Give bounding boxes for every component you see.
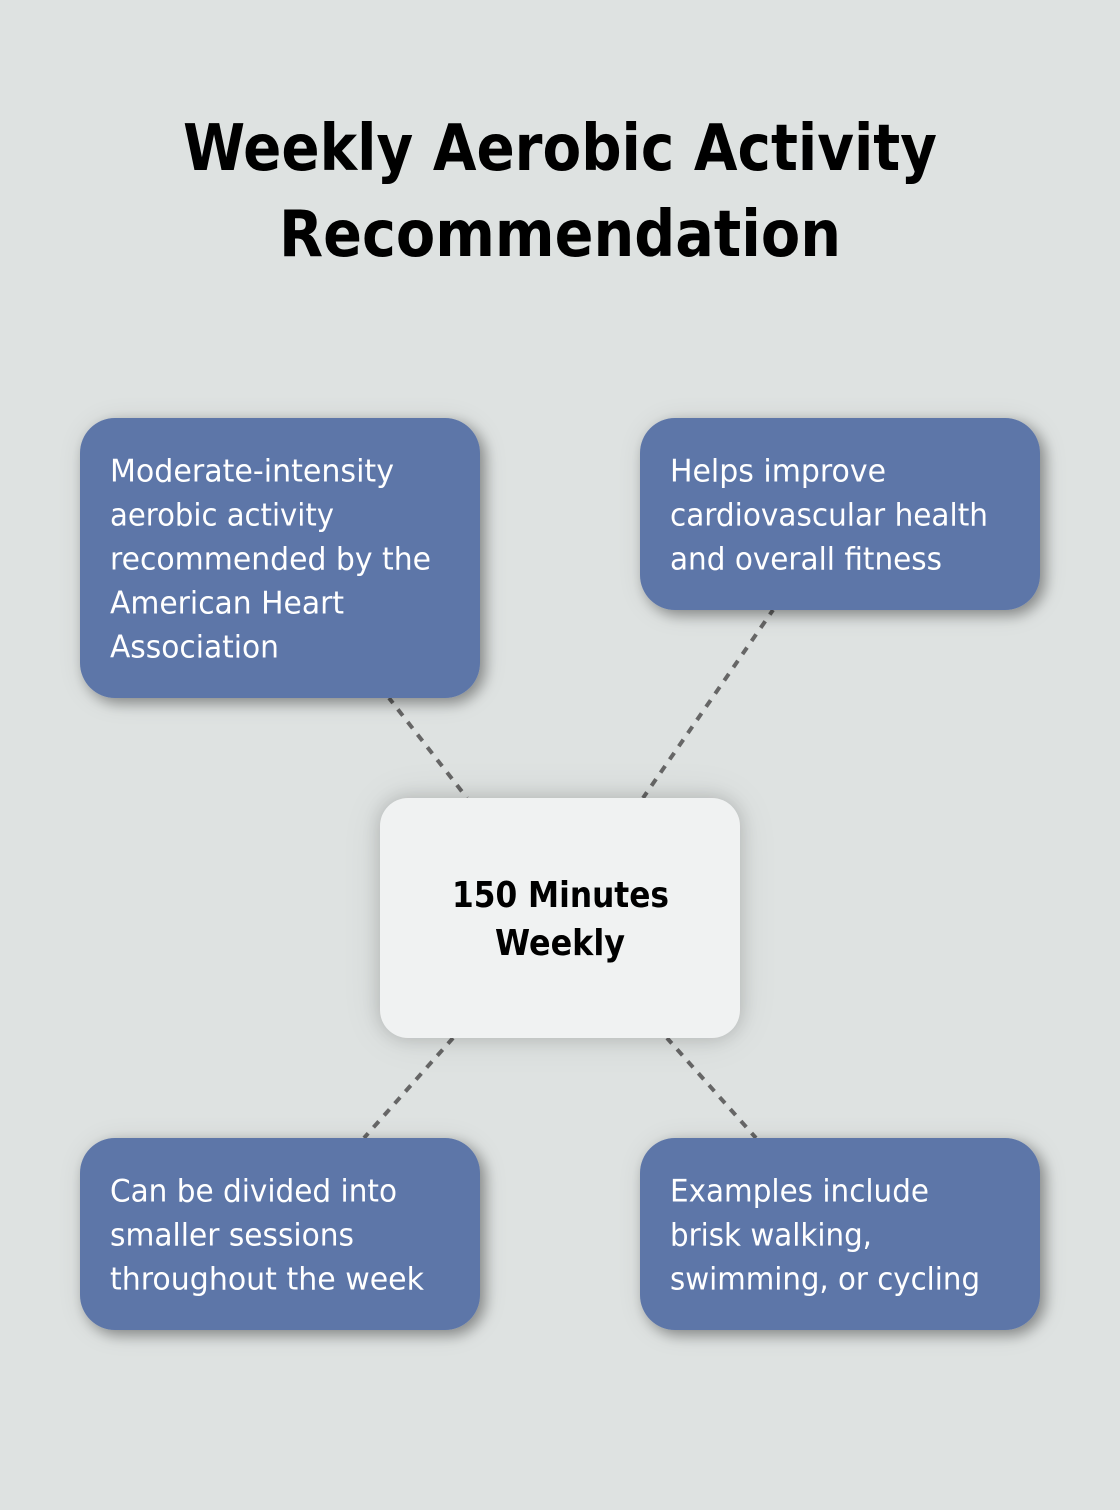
connector: center to bottom-left box xyxy=(364,1038,453,1138)
panel: top-left note: Moderate-intensity xyxy=(110,454,394,490)
panel: bottom-right note xyxy=(640,1138,1040,1330)
title xyxy=(183,112,937,272)
title: Recommendation xyxy=(279,198,841,272)
panel: bottom-right note: brisk walking, xyxy=(670,1218,872,1254)
panel: top-right note: and overall fitness xyxy=(670,542,942,578)
panel: bottom-left note: throughout the week xyxy=(110,1262,425,1298)
panel: top-left note: Association xyxy=(110,630,279,666)
panel: top-left note: American Heart xyxy=(110,586,344,622)
panel: bottom-right note: Examples include xyxy=(670,1174,929,1210)
panel: top-right note: cardiovascular health xyxy=(670,498,988,534)
panel: bottom-left note: smaller sessions xyxy=(110,1218,354,1254)
connector: center to top-right box xyxy=(643,610,773,798)
connector: center to top-left box xyxy=(389,698,467,798)
panel: top-right note: Helps improve xyxy=(670,454,886,490)
panel: top-left note: recommended by the xyxy=(110,542,431,578)
panel: top-left note: aerobic activity xyxy=(110,498,334,534)
connector: center to bottom-right box xyxy=(667,1038,756,1138)
panel: center highlight: Weekly xyxy=(495,923,625,964)
panel: top-right note xyxy=(640,418,1040,610)
panel: bottom-left note: Can be divided into xyxy=(110,1174,397,1210)
panel: center highlight xyxy=(380,798,740,1038)
panel: center highlight: 150 Minutes xyxy=(452,875,669,916)
panel: bottom-right note: swimming, or cycling xyxy=(670,1262,980,1298)
panel: top-left note xyxy=(80,418,480,698)
title: Weekly Aerobic Activity xyxy=(183,112,937,186)
panel: bottom-left note xyxy=(80,1138,480,1330)
